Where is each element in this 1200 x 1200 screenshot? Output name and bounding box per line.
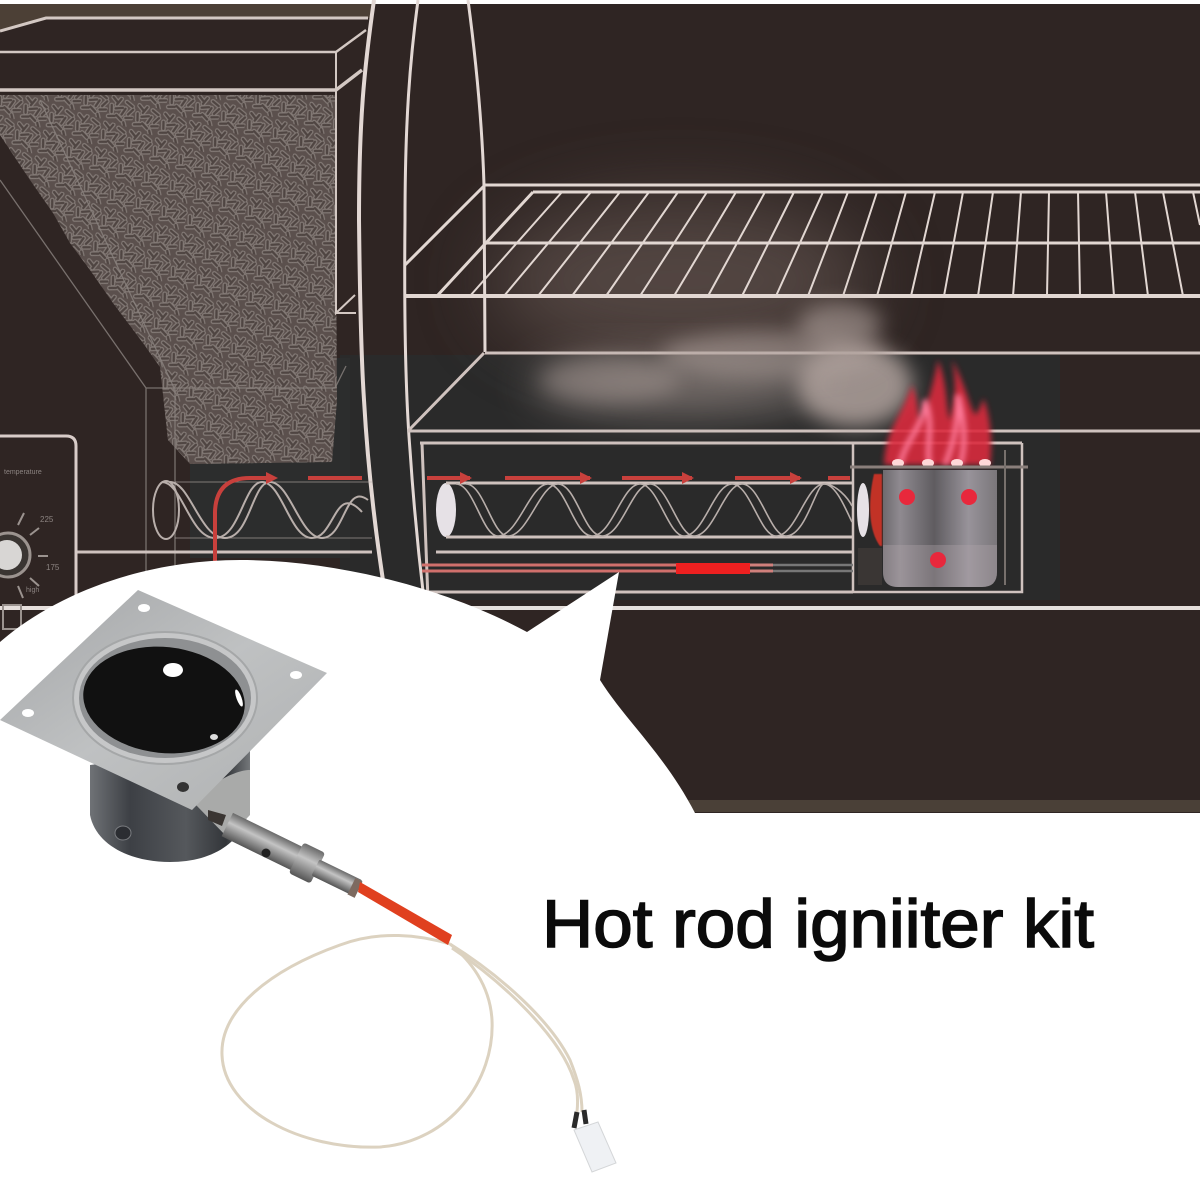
right auger tube (436, 483, 853, 537)
black terminals (574, 1110, 586, 1128)
igniter wires (222, 935, 582, 1147)
background: smoker cutaway illustration (0, 0, 1200, 815)
square mounting plate (0, 590, 327, 810)
white connector (574, 1122, 616, 1172)
grill chamber lines (0, 353, 1200, 608)
white speech bubble callout (0, 560, 1200, 1200)
central divider curves (359, 0, 485, 612)
burn pot cylinder (90, 745, 250, 862)
red pellet flow arrows (215, 472, 850, 570)
cooking rack (404, 185, 1200, 296)
smoke (530, 303, 913, 427)
control panel (0, 436, 76, 640)
product: hot rod igniter (0, 590, 616, 1172)
red igniter wire in diagram (422, 565, 853, 571)
plate bolt holes (22, 604, 302, 792)
red heat-shrink sleeve (358, 882, 452, 945)
left auger (153, 481, 372, 539)
control panel: 225 (40, 515, 54, 524)
pellet hopper (0, 95, 346, 600)
igniter tube (208, 810, 363, 898)
cylinder side hole (115, 826, 131, 840)
control panel: temperature (4, 469, 42, 476)
pot opening (73, 632, 257, 764)
caption: Hot rod igniiter kit (542, 886, 1094, 962)
background haze (490, 200, 870, 360)
hopper outline (0, 18, 368, 313)
elbow joint (196, 770, 250, 838)
control panel: 175 (46, 563, 60, 572)
control panel: high (26, 587, 39, 594)
burn pot with flames (850, 360, 1028, 587)
